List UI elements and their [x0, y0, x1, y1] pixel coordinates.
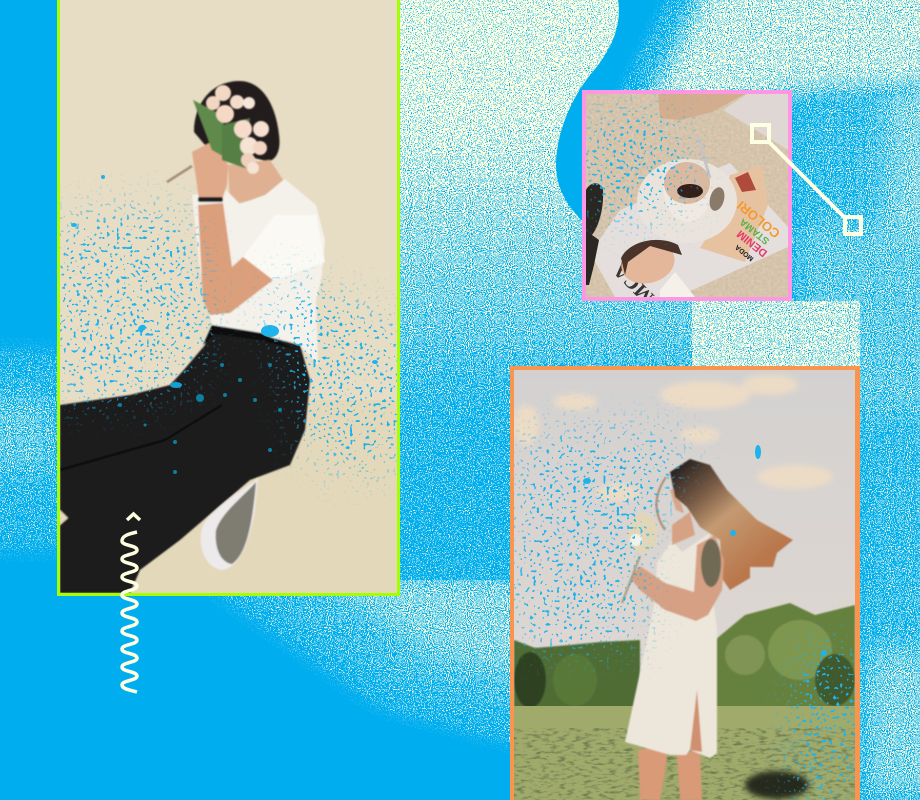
magazine face [621, 246, 675, 284]
magazine cover lines [616, 200, 779, 297]
tree line [514, 603, 855, 708]
panel: woman in field photo [510, 366, 860, 800]
shirt [192, 179, 325, 365]
teal splatter on pants [118, 363, 282, 474]
paint splatter [590, 120, 680, 210]
wristband [198, 197, 223, 202]
magazine cover lines: COLORI [734, 198, 783, 241]
dress [625, 533, 717, 758]
magazine [590, 163, 788, 297]
saucer [637, 159, 737, 243]
hand and stem [167, 166, 192, 182]
speckle: right side spray [796, 80, 920, 800]
belt [202, 324, 290, 348]
magazine cover lines: MODA [734, 243, 755, 262]
tan cup at top [658, 94, 745, 120]
magazine cover lines: MCA [609, 258, 659, 308]
paint splatter [60, 215, 400, 460]
clouds [513, 375, 833, 502]
neck and chin [228, 160, 283, 205]
bouquet [622, 556, 640, 603]
speckle: left edge spray [0, 365, 60, 535]
connector: line with square handles [752, 125, 861, 234]
magazine cover lines: STAMA [738, 216, 772, 246]
woman [622, 459, 793, 800]
panel: coffee and magazine photo [582, 90, 792, 308]
arm with tattoo [630, 535, 724, 621]
hair [670, 459, 793, 590]
face [670, 488, 684, 513]
spoon [710, 187, 724, 211]
cup [663, 175, 711, 222]
speckle: top right spray [640, 0, 920, 130]
forearm and upper arm [198, 203, 273, 315]
neck and shoulder [672, 512, 695, 545]
shoe [201, 478, 258, 570]
hair [194, 81, 280, 161]
grass field [514, 706, 855, 800]
speckle: dense block below pink photo [692, 301, 860, 366]
flowers [193, 85, 269, 174]
black shoe [586, 183, 603, 285]
paint splatter [520, 440, 690, 640]
squiggle line [122, 532, 137, 692]
magazine cover lines: DENIM [735, 227, 770, 259]
speckle: bottom spray [220, 570, 540, 730]
speckle: top centre spray and cream blob [400, 0, 692, 580]
panel: seated woman photo [57, 0, 400, 596]
icon: caret above squiggle [127, 514, 140, 520]
white cloth [723, 94, 788, 150]
pants [60, 325, 310, 593]
legs [638, 745, 668, 800]
